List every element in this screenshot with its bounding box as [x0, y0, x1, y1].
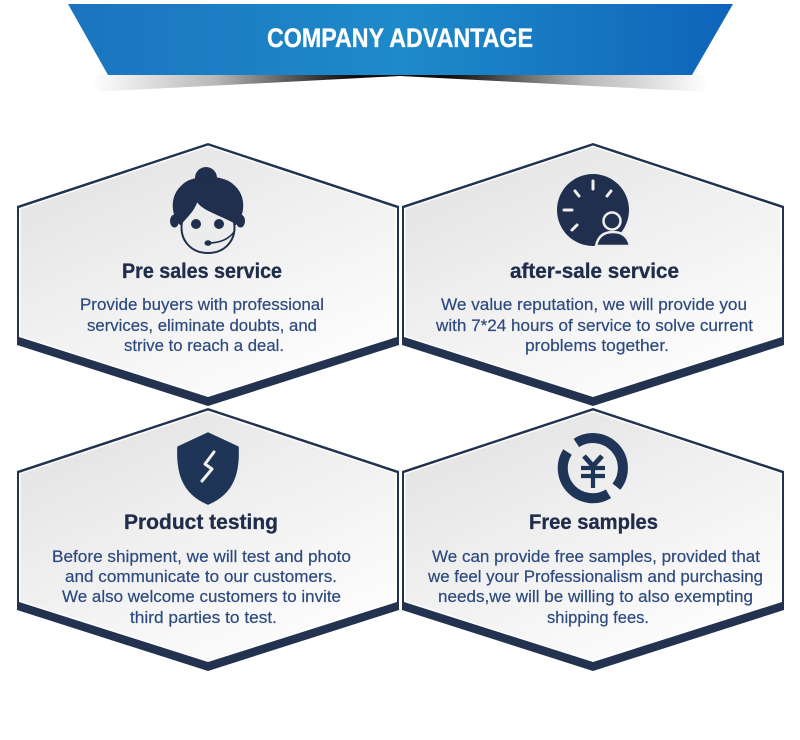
panel: product testing [17, 408, 399, 671]
description: We also welcome customers to invite [62, 587, 341, 606]
description: with 7*24 hours of service to solve current [435, 316, 753, 335]
hexagon card [402, 408, 784, 671]
title: COMPANY ADVANTAGE [267, 23, 533, 53]
description: shipping fees. [547, 608, 649, 627]
description [80, 295, 324, 355]
description [435, 295, 753, 355]
description: needs,we will be willing to also exempting [438, 587, 753, 606]
banner ribbon [68, 4, 733, 75]
heading: Free samples [529, 511, 658, 534]
description: third parties to test. [130, 608, 277, 627]
description [52, 547, 351, 627]
icon: shield [178, 433, 238, 504]
icon: clock with person [557, 174, 630, 246]
icon: headset agent [170, 167, 245, 253]
banner shadow [92, 75, 708, 92]
hexagon card [17, 143, 399, 406]
description: services, eliminate doubts, and [87, 316, 317, 335]
description: We can provide free samples, provided that [432, 547, 760, 566]
panel: pre sales service [17, 143, 399, 406]
description: Before shipment, we will test and photo [52, 547, 351, 566]
panel: free samples [402, 408, 784, 671]
heading: Product testing [124, 511, 278, 534]
description: problems together. [525, 336, 669, 355]
description: we feel your Professionalism and purchasing [427, 567, 763, 586]
heading: after-sale service [510, 260, 679, 283]
description [427, 547, 763, 627]
description: We value reputation, we will provide you [441, 295, 747, 314]
hexagon card [402, 143, 784, 406]
description: strive to reach a deal. [124, 336, 284, 355]
panel: after-sale service [402, 143, 784, 406]
header banner [68, 4, 733, 92]
icon: yuan ring [563, 438, 623, 498]
heading: Pre sales service [122, 260, 282, 283]
description: and communicate to our customers. [65, 567, 337, 586]
description: Provide buyers with professional [80, 295, 324, 314]
hexagon card [17, 408, 399, 671]
